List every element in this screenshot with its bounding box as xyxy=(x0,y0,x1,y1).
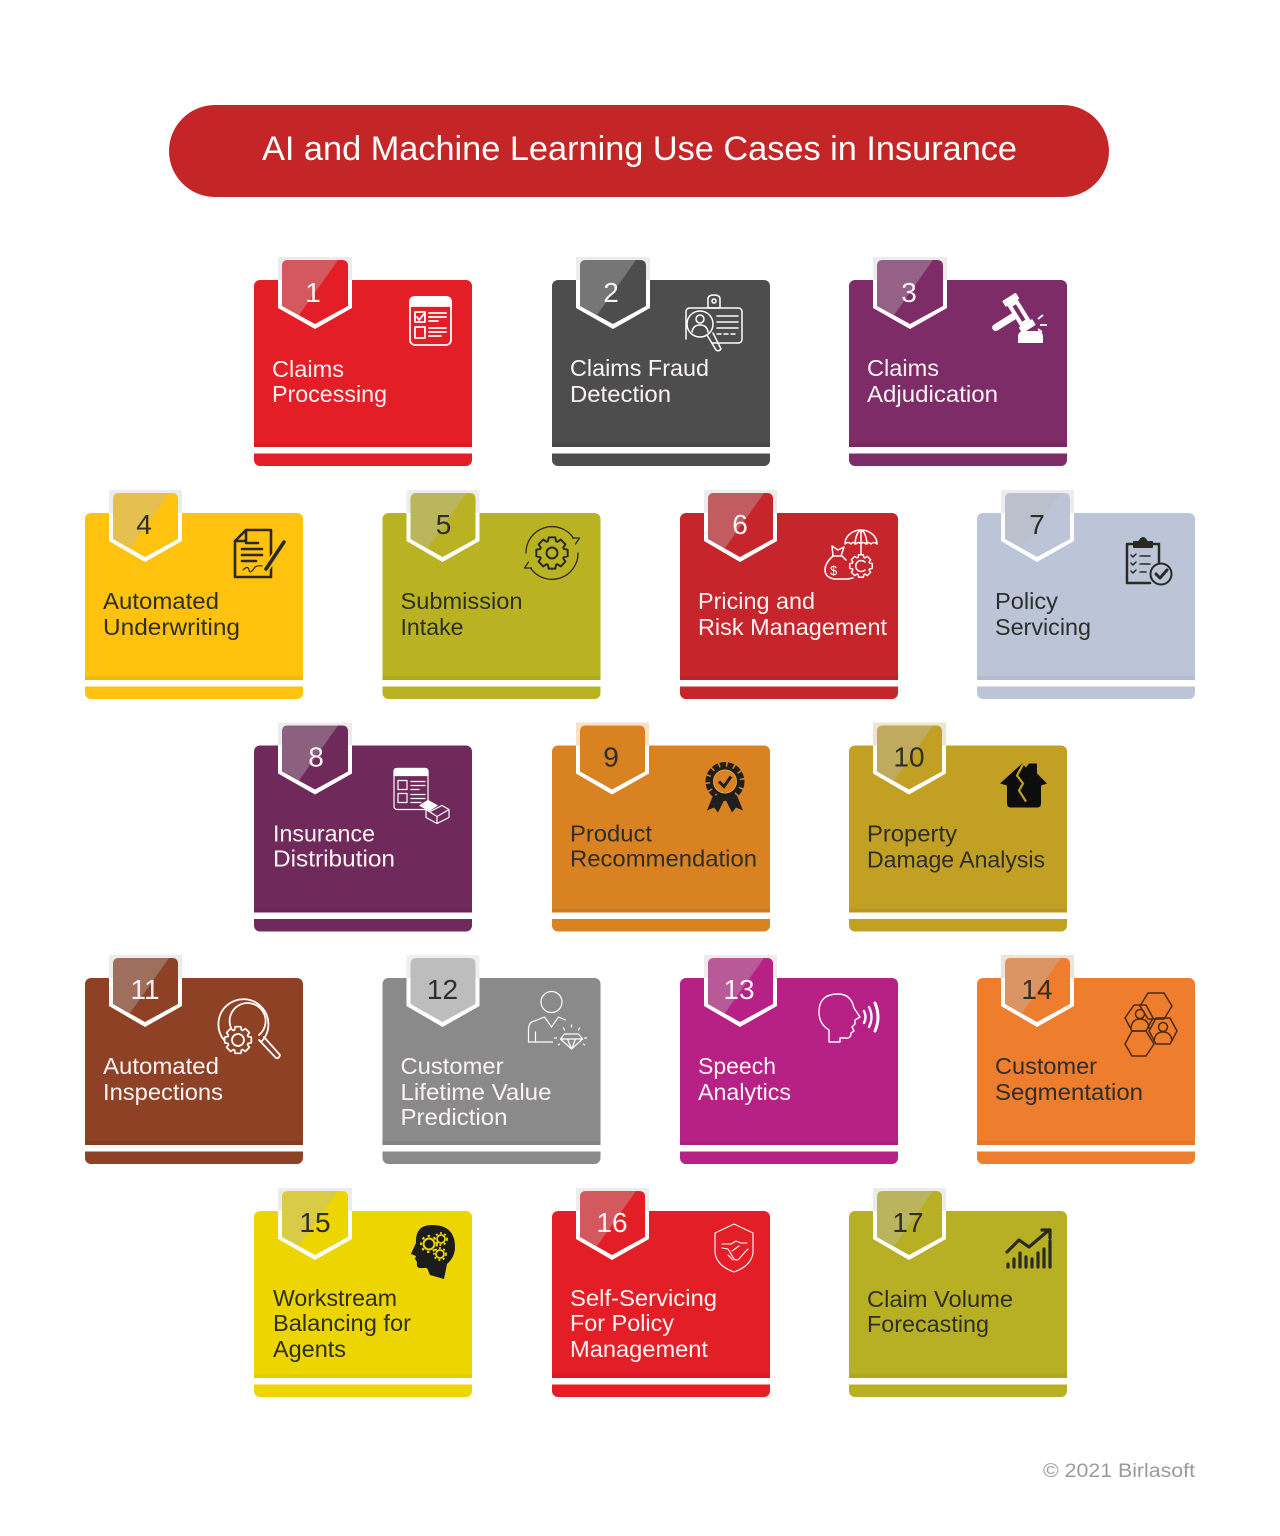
card 17: Claim Volume Forecasting: Forecasting xyxy=(867,1311,989,1337)
card 11: Automated Inspections: Inspections xyxy=(103,1079,223,1105)
card 5: Submission Intake: Submission xyxy=(400,588,522,614)
card 10: Property Damage Analysis xyxy=(849,722,1067,932)
card 3: Claims Adjudication xyxy=(849,257,1067,466)
card 10: Property Damage Analysis: Damage Analysis xyxy=(867,846,1045,872)
card 7: Policy Servicing: 7 xyxy=(1029,509,1045,540)
card 14: Customer Segmentation: 14 xyxy=(1021,974,1053,1005)
card 13: Speech Analytics: Analytics xyxy=(698,1079,791,1105)
card 7: Policy Servicing: Policy xyxy=(995,588,1059,614)
card 15: Workstream Balancing for Agents: Balancing for xyxy=(273,1310,411,1336)
card 8: Insurance Distribution: Distribution xyxy=(273,846,395,872)
icon: damaged house xyxy=(1000,764,1047,808)
card 13: Speech Analytics: Speech xyxy=(698,1053,776,1079)
card 3: Claims Adjudication: Adjudication xyxy=(867,381,998,407)
card 7: Policy Servicing: Servicing xyxy=(995,614,1091,640)
card 3: Claims Adjudication: Claims xyxy=(867,355,939,381)
card 7: Policy Servicing xyxy=(977,490,1195,699)
icon: gear with cycle arrows xyxy=(524,527,580,579)
card 9: Product Recommendation: 9 xyxy=(603,742,619,772)
card 9: Product Recommendation xyxy=(552,722,770,932)
card 10: Property Damage Analysis: 10 xyxy=(893,742,925,772)
card 12: Customer Lifetime Value Prediction: 12 xyxy=(427,974,458,1005)
card 15: Workstream Balancing for Agents: Workstream xyxy=(273,1285,397,1311)
card 5: Submission Intake: Intake xyxy=(400,614,464,640)
title banner: AI and Machine Learning Use Cases in Insurance xyxy=(262,130,1017,168)
card 17: Claim Volume Forecasting xyxy=(849,1188,1067,1397)
card 14: Customer Segmentation: Segmentation xyxy=(995,1079,1143,1105)
icon: money bag, umbrella, gear: $ xyxy=(830,563,838,578)
card 8: Insurance Distribution: 8 xyxy=(308,742,324,772)
icon: gavel xyxy=(983,293,1047,346)
card 1: Claims Processing: Claims xyxy=(272,356,344,382)
icon: hexagon customer segments xyxy=(1125,993,1177,1056)
card 12: Customer Lifetime Value Prediction xyxy=(382,955,600,1164)
icon: form and parcel xyxy=(394,768,449,824)
card 16: Self-Servicing For Policy Management: Self-Servicing xyxy=(570,1285,717,1311)
card 16: Self-Servicing For Policy Management xyxy=(552,1188,770,1397)
card 16: Self-Servicing For Policy Management: 16 xyxy=(596,1207,628,1238)
icon: checklist form xyxy=(410,297,451,345)
card 6: Pricing and Risk Management xyxy=(680,490,898,699)
card 12: Customer Lifetime Value Prediction: Prediction xyxy=(400,1104,508,1130)
icon: person with diamond xyxy=(528,992,586,1049)
card 2: Claims Fraud Detection xyxy=(552,257,770,466)
card 4: Automated Underwriting: 4 xyxy=(136,509,152,540)
card 13: Speech Analytics xyxy=(680,955,898,1164)
icon: shield with handshake xyxy=(715,1224,753,1272)
card 3: Claims Adjudication: 3 xyxy=(901,277,917,308)
card 12: Customer Lifetime Value Prediction: Lifetime Value xyxy=(400,1079,552,1105)
icon: magnifier with gear xyxy=(218,999,280,1058)
card 16: Self-Servicing For Policy Management: Management xyxy=(570,1336,709,1362)
card 4: Automated Underwriting: Underwriting xyxy=(103,614,240,640)
icon: document and pen xyxy=(235,530,284,577)
card 11: Automated Inspections xyxy=(85,955,303,1164)
card 16: Self-Servicing For Policy Management: For Policy xyxy=(570,1310,675,1336)
card 1: Claims Processing: 1 xyxy=(305,277,321,308)
card 14: Customer Segmentation xyxy=(977,955,1195,1164)
card 17: Claim Volume Forecasting: Claim Volume xyxy=(867,1286,1013,1312)
card 5: Submission Intake: 5 xyxy=(436,509,451,540)
copyright footer: © 2021 Birlasoft xyxy=(1043,1461,1196,1482)
icon: head silhouette with gears xyxy=(411,1225,455,1279)
card 2: Claims Fraud Detection: Claims Fraud xyxy=(570,355,709,381)
icon: money bag, umbrella, gear xyxy=(825,530,877,579)
card 12: Customer Lifetime Value Prediction: Customer xyxy=(400,1053,504,1079)
card 1: Claims Processing: Processing xyxy=(272,381,387,407)
card 17: Claim Volume Forecasting: 17 xyxy=(892,1207,924,1238)
card 1: Claims Processing xyxy=(254,257,472,466)
card 8: Insurance Distribution xyxy=(254,722,472,932)
icon: ID card with magnifier xyxy=(686,295,742,351)
card 9: Product Recommendation: Product xyxy=(570,820,653,846)
card 4: Automated Underwriting xyxy=(85,490,303,699)
card 4: Automated Underwriting: Automated xyxy=(103,588,219,614)
card 14: Customer Segmentation: Customer xyxy=(995,1053,1097,1079)
card 2: Claims Fraud Detection: 2 xyxy=(603,277,619,308)
icon: rising bar chart xyxy=(1007,1230,1050,1267)
card 10: Property Damage Analysis: Property xyxy=(867,820,958,846)
card 11: Automated Inspections: Automated xyxy=(103,1053,219,1079)
card 6: Pricing and Risk Management: 6 xyxy=(732,509,748,540)
card 8: Insurance Distribution: Insurance xyxy=(273,820,375,846)
icon: speaking head xyxy=(819,994,878,1042)
card 6: Pricing and Risk Management: Risk Management xyxy=(698,614,888,640)
card 2: Claims Fraud Detection: Detection xyxy=(570,381,671,407)
card 15: Workstream Balancing for Agents xyxy=(254,1188,472,1397)
card 6: Pricing and Risk Management: Pricing and xyxy=(698,588,815,614)
card 11: Automated Inspections: 11 xyxy=(130,974,160,1005)
card 5: Submission Intake xyxy=(382,490,600,699)
card 9: Product Recommendation: Recommendation xyxy=(570,846,757,872)
icon: award rosette xyxy=(707,764,743,812)
title banner xyxy=(169,105,1109,197)
card 15: Workstream Balancing for Agents: Agents xyxy=(273,1336,346,1362)
card 13: Speech Analytics: 13 xyxy=(723,974,755,1005)
icon: clipboard checklist xyxy=(1127,538,1172,584)
card 15: Workstream Balancing for Agents: 15 xyxy=(299,1207,331,1238)
